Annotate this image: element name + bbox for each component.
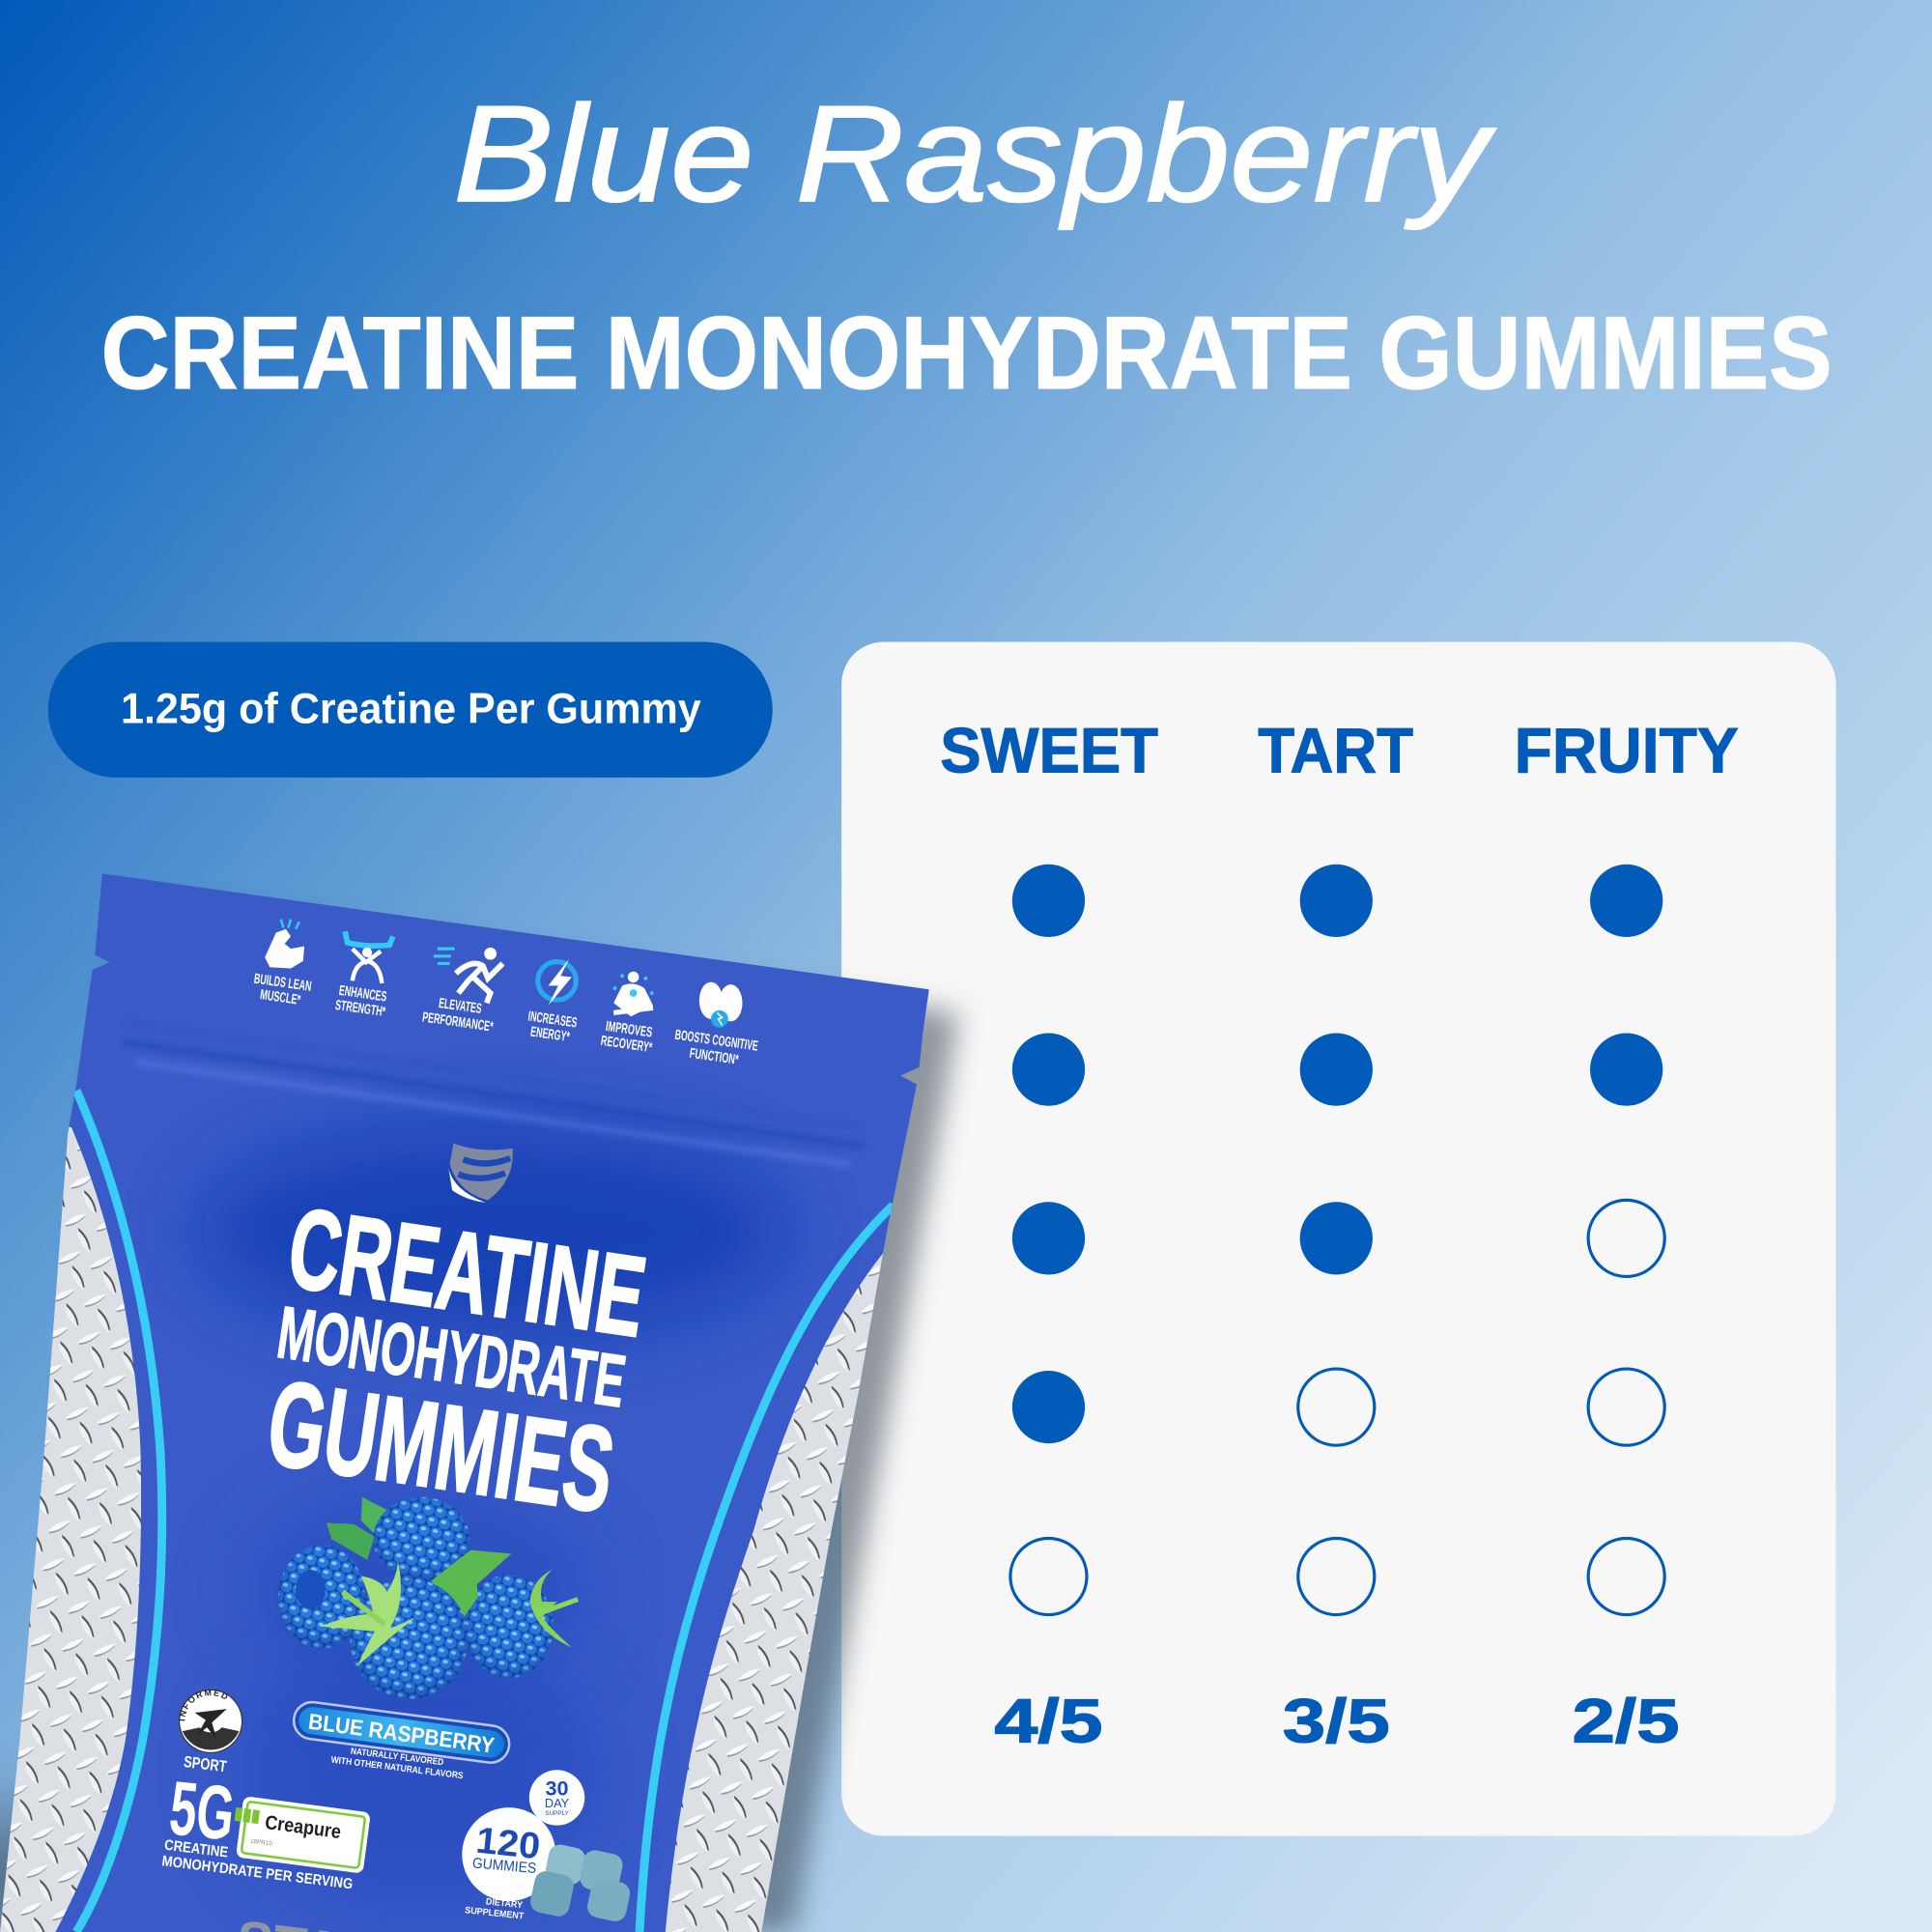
icon: barbell lifter <box>345 931 393 983</box>
5G per serving: 5G <box>166 1764 239 1857</box>
natural flavor note: WITH OTHER NATURAL FLAVORS <box>330 1755 464 1781</box>
gummy cubes <box>528 1842 632 1923</box>
brand shield logo <box>448 1144 513 1203</box>
rating: tart 3/5: 3/5 <box>1283 1687 1390 1756</box>
berry: right <box>465 1575 554 1678</box>
pouch base <box>0 863 949 1932</box>
benefit labels: ELEVATES <box>438 996 483 1017</box>
icon: runner <box>434 948 502 1003</box>
badge: creapure: 18PR10 <box>250 1838 273 1848</box>
callout pill: creatine per gummy: 1.25g of Creatine Per Gummy <box>121 686 701 733</box>
dietary supplement note: SUPPLEMENT <box>465 1905 525 1922</box>
benefit labels: INCREASES <box>527 1009 578 1031</box>
icon: meditation figure <box>613 972 653 1016</box>
raspberries illustration <box>278 1497 578 1699</box>
badge: 120 gummies <box>462 1807 555 1901</box>
cyan curve right <box>639 1205 894 1932</box>
icon: brain <box>699 982 742 1028</box>
product: creatine gummies pouch <box>0 873 929 1932</box>
badge: 120 gummies: 120 <box>474 1820 542 1867</box>
flavour label pill: BLUE RASPBERRY <box>307 1709 496 1758</box>
benefit labels: RECOVERY* <box>600 1034 653 1056</box>
berry: left <box>278 1545 365 1649</box>
title: Blue Raspberry: Blue Raspberry <box>453 78 1496 231</box>
badge: 30 day supply: DAY <box>545 1796 570 1810</box>
panel: flavor profile ratings <box>841 642 1836 1836</box>
callout pill: creatine per gummy <box>48 642 773 778</box>
pouch heading <box>260 1183 653 1538</box>
benefit labels <box>253 972 759 1068</box>
badge: creapure: Creapure <box>264 1812 342 1843</box>
berry: top <box>373 1497 469 1580</box>
badge: informed sport <box>178 1689 243 1772</box>
benefit labels: STRENGTH* <box>334 998 386 1020</box>
benefit labels: BUILDS LEAN <box>253 972 312 995</box>
badge: informed sport: SPORT <box>183 1752 228 1776</box>
silver panel right <box>665 1253 883 1932</box>
5G per serving: CREATINE <box>163 1837 229 1861</box>
column heading: sweet: SWEET <box>940 716 1158 787</box>
berry: front <box>350 1578 469 1699</box>
column heading: tart: TART <box>1258 716 1413 787</box>
dietary supplement note <box>465 1896 525 1922</box>
rating: fruity 2/5: 2/5 <box>1573 1687 1680 1756</box>
bag drop shadow <box>0 899 958 1932</box>
dietary supplement note: DIETARY <box>485 1896 524 1911</box>
icon: muscle arm <box>265 920 304 969</box>
benefit labels: FUNCTION* <box>689 1046 740 1068</box>
tart dots: 3 of 5 <box>1298 865 1375 1615</box>
GUMMIES: GUMMIES <box>260 1355 622 1538</box>
benefit labels: MUSCLE* <box>259 987 301 1009</box>
badge: 30 day supply: 30 <box>545 1776 569 1800</box>
badge: 30 day supply <box>529 1770 584 1826</box>
badge: informed sport: INFORMED <box>179 1689 228 1721</box>
zip seal lines <box>124 1023 863 1164</box>
CREATINE: CREATINE <box>281 1183 653 1360</box>
cyan curve left <box>76 1091 162 1932</box>
icon: lightning ring <box>538 958 576 1006</box>
5G per serving: MONOHYDRATE PER SERVING <box>161 1853 354 1892</box>
benefit labels: IMPROVES <box>605 1019 653 1041</box>
sweet dots: 4 of 5 <box>1010 865 1087 1615</box>
pouch centre shading <box>197 1127 788 1910</box>
natural flavor note: NATURALLY FLAVORED <box>350 1747 444 1768</box>
leaf: right <box>431 1550 511 1622</box>
silver panel left <box>0 1109 141 1932</box>
badge: 30 day supply: SUPPLY <box>545 1810 570 1817</box>
benefit labels: ENERGY* <box>529 1025 571 1045</box>
rating: sweet 4/5: 4/5 <box>994 1687 1103 1756</box>
5G per serving <box>161 1764 354 1892</box>
calyx front <box>321 1561 415 1665</box>
MONOHYDRATE: MONOHYDRATE <box>272 1292 631 1423</box>
benefit labels: BOOSTS COGNITIVE <box>674 1028 759 1055</box>
benefit labels: PERFORMANCE* <box>421 1009 495 1036</box>
leaf: top <box>361 1497 393 1537</box>
natural flavor note <box>330 1747 464 1781</box>
benefit icons row <box>253 920 759 1068</box>
badge: 120 gummies: GUMMIES <box>471 1855 537 1877</box>
column heading: fruity: FRUITY <box>1515 716 1739 787</box>
benefit labels: ENHANCES <box>338 983 387 1006</box>
fruity dots: 2 of 5 <box>1588 865 1664 1615</box>
calyx right <box>529 1570 578 1647</box>
leaf: left <box>327 1523 375 1560</box>
badge: creapure <box>230 1795 371 1874</box>
